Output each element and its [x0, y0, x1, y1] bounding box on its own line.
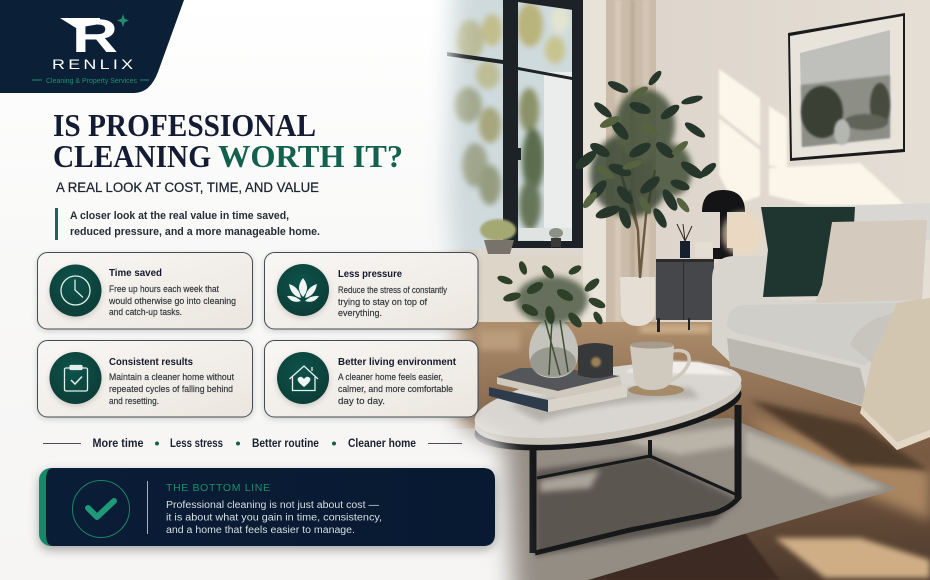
coaster [628, 384, 684, 396]
panel: consistent results: and resetting. [109, 396, 159, 406]
logo mark [60, 9, 118, 62]
knit throw [860, 298, 930, 450]
panel: consistent results: repeated cycles of falling behind [109, 384, 233, 394]
subtitle: A REAL LOOK AT COST, TIME, AND VALUE [56, 180, 319, 195]
small window plant [480, 219, 563, 254]
wall below the window [478, 255, 588, 330]
panel: consistent results [38, 340, 252, 417]
icon: clock [61, 276, 90, 305]
framed painting [788, 13, 905, 161]
photo: sunlit living room [420, 0, 930, 580]
panel: better living environment: calmer, and more comfortable [338, 384, 453, 394]
rug [430, 418, 897, 580]
panel: less pressure: everything. [338, 308, 382, 318]
panel: better living environment [264, 340, 478, 417]
callout: the bottom line: Professional cleaning is not just about cost — [166, 500, 379, 511]
planter [620, 277, 655, 326]
panel: less pressure: Reduce the stress of constantly [338, 285, 447, 295]
title: IS PROFESSIONAL [53, 107, 316, 143]
panel: time saved: and catch-up tasks. [109, 307, 182, 317]
panel: consistent results: Consistent results [109, 356, 193, 368]
panel: time saved: Free up hours each week that [109, 284, 219, 294]
brand name: RENLIX [52, 57, 133, 72]
panel: less pressure: Less pressure [338, 268, 402, 280]
cream pillow [815, 220, 927, 303]
callout: the bottom line: THE BOTTOM LINE [166, 482, 270, 494]
wall [420, 0, 930, 340]
icon: check mark [72, 480, 130, 538]
sofa [712, 256, 930, 425]
panel: better living environment: Better living environment [338, 356, 456, 368]
panel: time saved: Time saved [109, 267, 162, 279]
stacked books [489, 368, 627, 412]
intro text block: A closer look at the real value in time saved, [70, 210, 289, 222]
panel: less pressure: trying to stay on top of [338, 297, 427, 307]
cabinet [656, 259, 714, 332]
brand tagline: Cleaning & Property Services [46, 78, 137, 85]
benefits strip [43, 438, 462, 450]
curtain [606, 0, 656, 322]
panel: consistent results: Maintain a cleaner home without [109, 372, 234, 382]
intro text block [55, 208, 320, 240]
icon: clipboard [64, 366, 88, 391]
logo star [117, 14, 129, 27]
candle [578, 343, 613, 378]
panel: time saved: would otherwise go into cleaning [108, 296, 236, 306]
dark green pillow [761, 207, 855, 297]
intro text block: reduced pressure, and a more manageable home. [70, 226, 320, 238]
icon: house with heart [290, 366, 318, 390]
window sill [478, 248, 586, 255]
title: WORTH IT? [218, 138, 403, 174]
benefits strip: More time [92, 438, 144, 450]
logo panel [0, 0, 184, 93]
panel: less pressure [264, 252, 478, 329]
window glass and trees [420, 0, 585, 250]
benefits strip: Better routine [252, 438, 319, 450]
panel: better living environment: A cleaner home feels easier, [338, 372, 443, 382]
icon: lotus [287, 278, 319, 302]
title [53, 107, 403, 174]
glass vase [529, 320, 578, 378]
sheer curtain [583, 0, 609, 330]
coffee mug [630, 342, 689, 390]
callout: the bottom line: it is about what you gain in time, consistency, [166, 512, 382, 524]
floor [420, 322, 930, 580]
white fade over photo [0, 0, 560, 580]
callout: the bottom line [39, 468, 495, 546]
lamp glow [722, 212, 762, 256]
vase foliage [496, 260, 607, 330]
benefits strip: Cleaner home [348, 438, 416, 450]
benefits strip: Less stress [170, 438, 223, 450]
coffee table top [469, 347, 747, 465]
logo mark: R [72, 9, 118, 62]
back cushion [818, 203, 930, 240]
table lamp [702, 190, 745, 259]
diffuser and candle [677, 224, 713, 258]
title: CLEANING [53, 138, 211, 174]
panel: better living environment: day to day. [338, 396, 385, 406]
callout: the bottom line: and a home that feels easier to manage. [166, 525, 355, 536]
floor plant [573, 69, 718, 278]
sunlight on wall [719, 69, 905, 205]
window frame [447, 0, 583, 248]
panel: time saved [38, 252, 252, 329]
coffee table base [533, 405, 740, 553]
